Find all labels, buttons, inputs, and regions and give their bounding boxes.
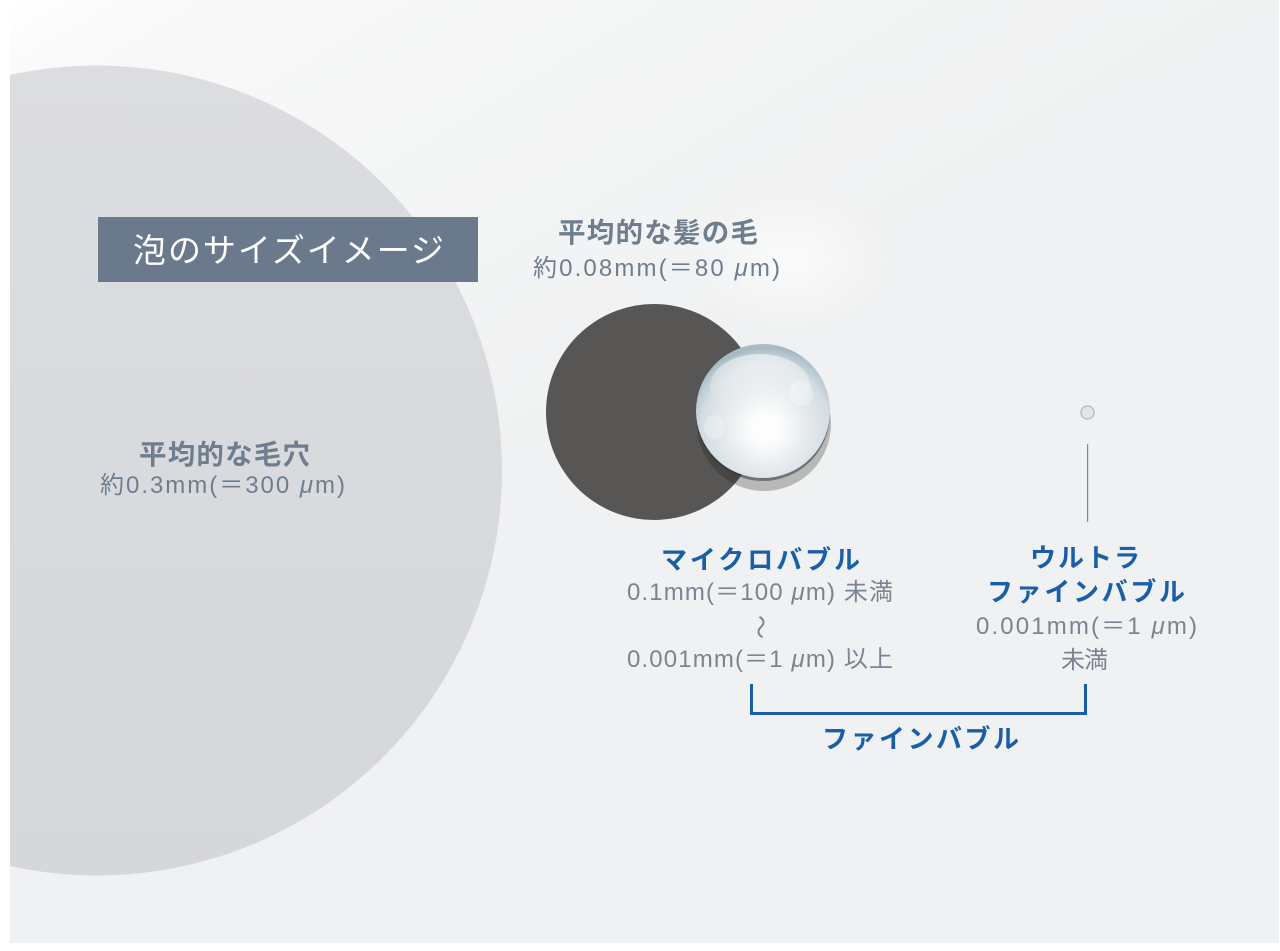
ultra fine bubble label: ウルトラ — [1030, 543, 1140, 573]
ultra fine bubble — [1081, 406, 1094, 419]
hair label: 平均的な髪の毛 — [558, 217, 758, 248]
bracket — [752, 684, 1086, 714]
ultra fine bubble label: ファインバブル — [987, 577, 1185, 607]
pore label: 平均的な毛穴 — [139, 439, 310, 470]
title — [98, 217, 478, 282]
leader line — [1087, 444, 1088, 522]
fine bubble label: ファインバブル — [822, 724, 1019, 754]
micro bubble label: マイクロバブル — [661, 545, 860, 575]
pore size circle — [0, 66, 502, 876]
title: 泡のサイズイメージ — [133, 232, 444, 269]
hair label — [533, 217, 780, 282]
micro bubble label: 〜 — [746, 615, 773, 639]
micro bubble label — [627, 545, 893, 673]
ultra fine bubble label: 未満 — [1061, 647, 1108, 674]
ultra fine bubble label — [976, 543, 1197, 674]
hair label: 約0.08mm(＝80 μm) — [533, 255, 780, 282]
hair circle — [546, 304, 762, 520]
ultra fine bubble label: 0.001mm(＝1 μm) — [976, 613, 1197, 640]
pore label — [100, 439, 345, 499]
micro bubble label: 0.1mm(＝100 μm) 未満 — [627, 579, 893, 606]
micro bubble label: 0.001mm(＝1 μm) 以上 — [627, 646, 893, 673]
pore label: 約0.3mm(＝300 μm) — [100, 472, 345, 499]
micro bubble — [696, 344, 831, 491]
